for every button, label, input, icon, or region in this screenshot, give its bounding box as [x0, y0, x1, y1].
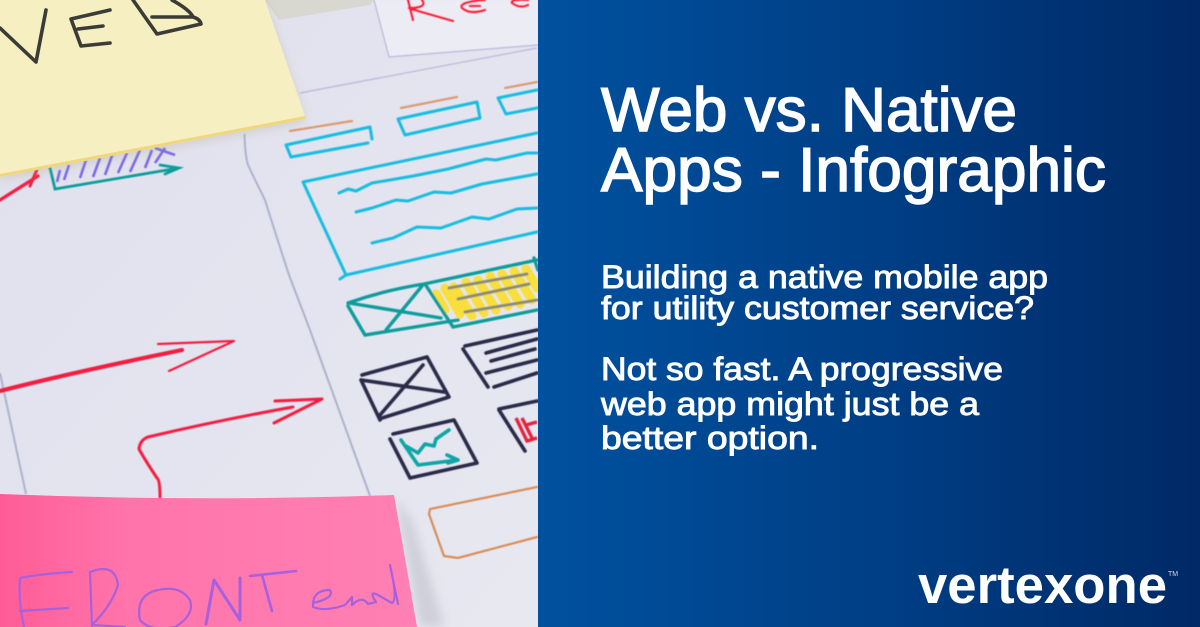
- white note with red handwriting: [300, 0, 538, 93]
- answer text: better option.: [601, 420, 819, 456]
- photo: paper wireframe sketches with sticky notes: [0, 0, 538, 627]
- answer text: Not so fast. A progressive: [601, 351, 1003, 387]
- intro question: [601, 259, 1048, 326]
- handwritten FRONT end: [20, 565, 398, 627]
- purple hatched sketch with teal arrow: [50, 148, 179, 189]
- tape at top of page: [265, 0, 374, 20]
- small red chart sketch: [516, 418, 537, 441]
- logo: vertexone: TM: [1168, 571, 1178, 578]
- wireframe: cyan top boxes and content block: [286, 90, 537, 279]
- orange labels and lower box: [290, 82, 537, 558]
- teal banner with yellow scribble: [348, 258, 538, 335]
- teal chart sketch: [401, 430, 458, 465]
- title: Apps - Infographic: [601, 136, 1106, 205]
- dark wireframe icons: [361, 330, 537, 478]
- answer text: [600, 351, 1003, 456]
- title: [601, 76, 1106, 205]
- column guide lines: [0, 134, 370, 496]
- pink sticky note: [0, 494, 445, 627]
- intro question: Building a native mobile app: [601, 259, 1048, 295]
- red arrows: [0, 167, 322, 497]
- yellow sticky note: [0, 0, 306, 180]
- right panel: blue gradient: [538, 0, 1200, 627]
- logo: vertexone: vertexone: [918, 556, 1167, 615]
- handwritten WEB: [0, 0, 201, 62]
- answer text: web app might just be a: [600, 386, 979, 422]
- intro question: for utility customer service?: [601, 290, 1034, 326]
- title: Web vs. Native: [601, 76, 1017, 145]
